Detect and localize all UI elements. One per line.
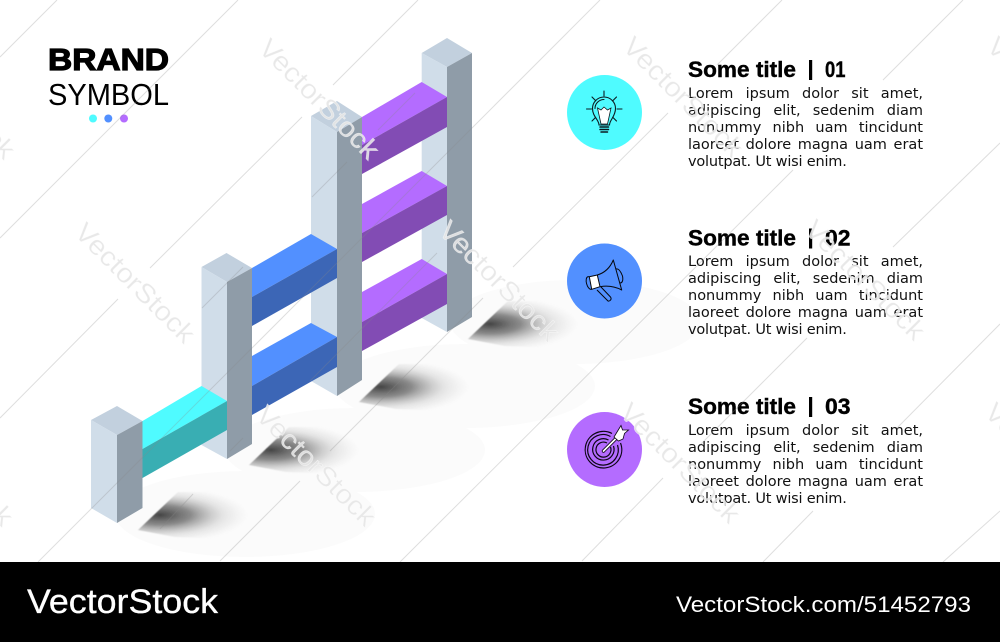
watermark overlay: VectorStock — [799, 214, 931, 346]
body text 3: laoreet dolore magna uam erat — [688, 474, 923, 490]
body text 1 — [688, 86, 923, 170]
body text 2: nonummy nibh uam tincidunt — [688, 288, 923, 304]
footer bar: VectorStock — [27, 583, 219, 621]
brand title — [48, 42, 169, 112]
section title 3 — [688, 394, 850, 419]
body text 2: adipiscing elit, sedenim diam — [688, 271, 923, 287]
body text 1: adipiscing elit, sedenim diam — [688, 102, 923, 118]
brand title: BRAND — [48, 42, 169, 77]
column 2 — [202, 253, 252, 459]
watermark overlay: VectorStock — [69, 217, 201, 349]
body text 3: Lorem ipsum dolor sit amet, — [688, 422, 923, 438]
brand dots — [89, 114, 128, 122]
section title 1: Some title — [688, 57, 796, 82]
icon circle 2: megaphone — [567, 244, 642, 318]
watermark overlay: VectorStock — [253, 33, 385, 165]
column 4 — [422, 38, 472, 332]
section title 1: 01 — [825, 57, 846, 82]
section title 2: Some title — [688, 226, 796, 250]
body text 2 — [688, 254, 923, 338]
blue rungs — [252, 234, 337, 415]
body text 1: volutpat. Ut wisi enim. — [688, 154, 847, 170]
footer bar — [0, 562, 1000, 642]
body text 3: volutpat. Ut wisi enim. — [688, 490, 847, 506]
watermark overlay: VectorStock — [617, 31, 749, 163]
body text 1: laoreet dolore magna uam erat — [688, 136, 923, 152]
section title 1 — [688, 57, 846, 82]
brand title: SYMBOL — [48, 77, 169, 112]
body text 3: adipiscing elit, sedenim diam — [688, 440, 923, 456]
section title 2: 02 — [825, 226, 850, 250]
watermark overlay: VectorStock — [250, 400, 382, 532]
footer bar: VectorStock.com/51452793 — [676, 592, 971, 617]
watermark overlay: VectorStock — [433, 215, 565, 347]
watermark overlay: VectorStock — [614, 397, 746, 529]
column 1 — [91, 406, 142, 523]
body text 2: Lorem ipsum dolor sit amet, — [688, 254, 923, 270]
body text 1: Lorem ipsum dolor sit amet, — [688, 86, 923, 102]
section title 3: Some title — [688, 394, 796, 419]
pale ground ellipses — [115, 280, 700, 557]
body text 1: nonummy nibh uam tincidunt — [688, 120, 923, 136]
body text 3: nonummy nibh uam tincidunt — [688, 456, 923, 472]
body text 2: laoreet dolore magna uam erat — [688, 305, 923, 321]
body text 2: volutpat. Ut wisi enim. — [688, 322, 847, 338]
body text 3 — [688, 422, 923, 506]
column 3 — [311, 101, 362, 396]
cyan rung — [142, 386, 227, 478]
purple rungs — [362, 82, 447, 351]
section title 3: 03 — [825, 394, 850, 419]
icon circle 1: light bulb — [567, 75, 642, 150]
cast shadows — [138, 301, 580, 540]
icon circle 3: target with dart — [567, 412, 642, 487]
section title 2 — [688, 226, 850, 250]
